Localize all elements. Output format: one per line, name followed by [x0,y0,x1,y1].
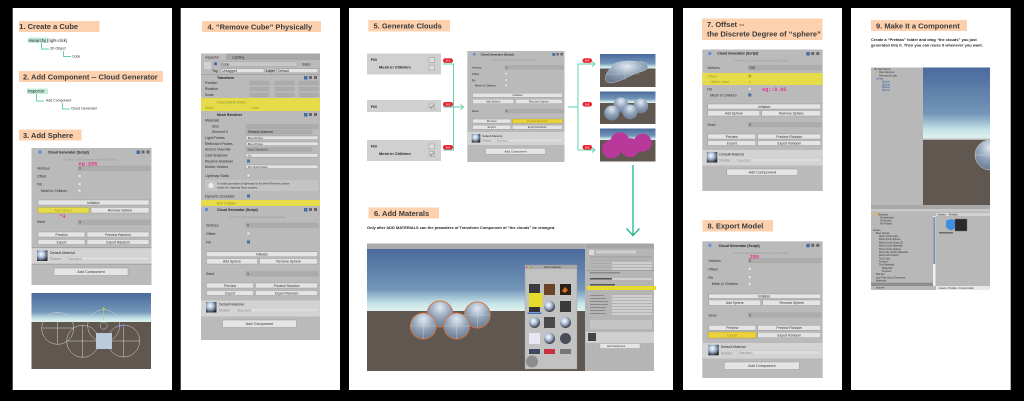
inspector: remove cube: Default [278,69,289,73]
inspector: generate clouds: Export Random [528,125,548,129]
project window: Assets [873,229,881,232]
inspector: remove cube: Motion Vectors [205,165,228,169]
inspector: remove cube: On [248,154,252,157]
inspector: remove cube: Lighting [232,55,244,59]
text: step 9 description [871,37,983,48]
result: separate spheres [600,92,656,124]
arrow: down to step 6 [626,165,640,236]
project window: Rock Aura Preset [879,254,899,257]
inspector: remove cube: Size [212,124,219,128]
inspector: generate clouds: Initialize [513,93,523,97]
inspector column [586,244,656,348]
project window: Assets [938,214,946,217]
inspector: remove cube: Static [302,62,311,66]
inspector flow: Cloud Generator [71,106,98,110]
inspector: add sphere: Export [57,240,66,244]
result: merged cloud [600,54,656,87]
project window: Textures [882,270,892,273]
inspector: offset: Seed [707,123,716,127]
inspector: add sphere: Add Sphere [55,208,73,212]
inspector: remove cube: Lightmap Static [205,174,229,178]
hierarchy list: My New Scene [874,68,891,71]
inspector: remove cube: None (Transform) [248,148,268,151]
inspector: remove cube: Scale [205,93,214,97]
inspector: remove cube: Per Object Motion [248,166,269,169]
inspector: add sphere: Cloud Generator (Script) [48,150,89,154]
hierarchy flow: 3D Object [50,46,66,50]
inspector: offset [702,50,823,191]
inspector: offset: Cloud Generator (Script) [717,52,758,56]
inspector: add sphere: Remove Sphere [108,208,132,212]
inspector: remove cube: Vertices [206,224,219,228]
inspector: offset: Mesh in Children [710,94,737,98]
inspector: remove cube: Export [225,291,235,295]
text: step 9 description: generated into it. Then you can reuse it whenever you want. [871,42,983,48]
inspector: add sphere: 0 [79,166,81,170]
project window: Low Poly Cloud Generator [876,276,905,280]
result: magenta spheres [600,128,656,162]
scene view: spheres and cube [32,293,151,369]
inspector: remove cube: Untagged [222,69,237,73]
inspector: remove cube: Fill [206,240,211,244]
inspector: export: Remove Sphere [780,301,804,305]
inspector column: Add Component [607,345,625,348]
inspector: export: Offset [708,267,718,271]
panel: steps 5 and 6 [349,8,673,390]
inspector: generate clouds: Cloud Generator (Script) [481,52,514,56]
inspector: remove cube: Layer [266,69,276,73]
icon: prefab cube [946,219,956,230]
project window: Rock Ally Infinity Materials [879,251,909,254]
inspector: generate clouds: Fill [472,78,476,82]
inspector: remove cube: Light Probes [205,136,225,140]
hierarchy list: Main Camera [879,71,895,74]
inspector: generate clouds [467,51,564,162]
heading: step 3 [19,130,82,140]
inspector: add sphere: Default-Material [50,251,75,255]
inspector flow: Add Component [46,98,71,102]
inspector: add sphere: Initialize [87,201,100,205]
inspector: remove cube: Rotation [205,87,218,91]
inspector: remove cube: Seed [206,272,214,276]
inspector: generate clouds: Default-Material [482,134,503,138]
heading: step 7 [702,18,822,40]
heading: step 2: 2. Add Component -- Cloud Generator [23,72,158,82]
project window: Favorites [878,214,889,216]
inspector: offset: Preview [726,135,738,139]
inspector: remove cube: Mesh Renderer [217,113,243,117]
inspector: offset: Default-Material [719,152,744,156]
hierarchy list: Sphere [882,86,891,89]
heading: step 3: 3. Add Sphere [23,131,73,140]
inspector: remove cube: Default-Material [248,130,273,134]
panel: step 4 [181,8,340,390]
inspector: remove cube: Reflection Probes [205,142,233,146]
inspector: generate clouds: Standard [496,139,508,143]
badges: left: 5-1 [446,59,450,63]
inspector: export: Seed [708,313,717,317]
heading: step 4: 4. “Remove Cube” Physically [208,22,313,31]
project window: Textures [879,260,889,264]
inspector: export: Add Sphere [726,301,744,305]
highlight: offset rows [702,73,823,85]
inspector: export: Low Poly Cloud Generator by NeoXStudios [733,251,789,255]
inspector: export: Default-Material [721,345,746,349]
inspector: generate clouds: 0 [506,65,508,69]
screenshot: prefab [871,68,990,290]
badges: left: 5-3 [446,145,450,149]
heading: step 6: 6. Add Materals [374,209,429,218]
project window: Best Clouds [876,232,890,235]
heading: step 5 [368,20,450,32]
inspector: add sphere: 0 [79,220,81,224]
inspector: offset: 255 [749,66,755,70]
inspector: add sphere: Export Random [106,240,130,244]
text: step 9 description: Create a “Prefabs” folder and drag “the clouds” you just [871,37,977,42]
inspector: add sphere: Preview [55,233,68,237]
scene view [923,68,990,205]
hierarchy list [874,68,897,92]
badges: left [443,58,453,150]
inspector: offset: Add Component [749,170,777,174]
arrow: inspector to results [568,62,595,152]
inspector: generate clouds: Remove Sphere [529,99,549,103]
heading: step 6 [368,208,439,218]
project window: All Materials [880,216,894,220]
inspector: remove cube: Anchor Override [205,148,231,152]
inspector: remove cube: Initialize [256,252,268,256]
project window: Prefabs [949,214,958,217]
option box: no fill [367,54,441,74]
hierarchy flow [28,38,80,58]
inspector: remove cube: Dynamic Occluded [205,194,234,198]
inspector: offset: Shader [719,158,731,162]
inspector: remove cube: 0 [247,272,249,276]
inspector: export: Add Component [748,364,776,368]
highlight: export button: Export [727,333,737,337]
hierarchy list: Sphere [882,83,891,86]
highlight: mesh filter [201,98,320,111]
inspector: generate clouds: Add Sphere [486,99,501,103]
inspector: offset: Standard [736,158,751,162]
inspector: add sphere: Seed [37,220,45,224]
hierarchy list: Directional Light [879,74,897,77]
hierarchy list: Sphere [882,89,891,92]
project window: Test Materials [879,264,895,267]
inspector: offset: Low Poly Cloud Generator by NeoXStudios [733,58,789,62]
heading: step 1 [19,21,100,32]
highlight: box collider: Box Collider [217,202,237,206]
icon: dark prefab [955,219,967,231]
option box: mesh in children: Fill [371,144,377,148]
inspector: add sphere: Shader [50,257,62,261]
project window: All Models [880,220,892,222]
highlight: offset rows: 0 [749,80,751,84]
inspector: remove cube: Receive Shadows [205,160,233,164]
highlight: mesh filter: Cube [251,106,259,110]
inspector: offset: Preview Random [776,135,802,139]
panel: steps 7 and 8 [683,8,842,390]
inspector: remove cube: Preview [224,284,237,288]
inspector: generate clouds: Seed [472,109,479,113]
inspector: export: Cloud Generator (Script) [719,244,760,248]
inspector: remove cube: Shader [219,308,231,312]
project window: Rock Circle Options [879,248,902,251]
inspector: offset: Export [727,141,737,145]
inspector flow: Inspector [28,89,45,94]
inspector: offset: Initialize [758,105,771,109]
inspector: export: Preview Random [776,326,802,330]
inspector: remove cube: To enable generation of lightmaps for this Mesh Renderer, please [217,182,290,186]
option box: mesh in children: Mesh in Children [379,151,411,156]
project window: Materials [876,280,887,283]
project window: Rock Circle Sphere [879,238,901,241]
inspector: export: 0 [749,313,751,317]
heading: step 7: the Discrete Degree of “sphere” [707,30,821,38]
inspector: remove cube: Preview Random [274,284,300,288]
badges: right: 5-1 [585,59,590,63]
inspector: remove cube: Low Poly Cloud Generator by NeoXStudios [230,215,286,219]
project window: Scenes [876,286,885,290]
text: step 6 note: Only after ADD MATERIALS can the pramaters of Transform Component of “the clouds” be changed. [367,225,555,230]
screenshot: add materials [367,244,656,371]
inspector: remove cube: Remove Sphere [276,260,301,264]
inspector: generate clouds: Export [488,125,496,129]
highlight: shader row [587,286,656,290]
highlight: material [529,293,542,307]
inspector: remove cube: Element 0 [212,130,228,134]
project window: All Prefabs [880,223,893,226]
hierarchy flow: Hierarchy (right-click) [28,38,68,43]
inspector: remove cube: Inspector [205,55,220,59]
inspector: generate clouds: Add Component [504,149,527,153]
inspector: offset: Add Sphere [725,112,743,116]
inspector: remove cube: Default-Material [219,302,244,306]
hierarchy flow: Cube [72,54,80,58]
inspector: remove cube: Transform [217,76,234,80]
inspector: export: Shader [721,351,733,355]
highlight: mesh filter: Mesh [205,106,214,110]
highlight: mesh filter: Cube (Mesh Filter) [217,100,246,104]
inspector: remove cube [201,54,320,340]
inspector: remove cube: Cast Shadows [205,154,228,158]
inspector: remove cube: Position [205,81,218,85]
inspector: generate clouds: Low Poly Cloud Generator by NeoXStudios [492,59,537,62]
inspector: add sphere: Add Component [77,270,106,274]
inspector: export: Fill [708,276,713,280]
hierarchy list: Sphere [882,80,891,84]
inspector: remove cube: enable the 'Lightmap Static' property. [217,186,258,190]
inspector: add sphere: Offset [37,174,46,178]
highlight: offset rows: Offset Value [710,80,729,84]
inspector: export: Preview [726,326,739,330]
inspector: add sphere: Preview Random [105,233,131,237]
option box: no fill: Mesh in Children [379,65,411,70]
inspector: offset: Fill [707,88,712,92]
inspector: add sphere: Standard [68,257,82,261]
inspector: export: Vertices [708,259,721,263]
inspector: export: Standard [738,351,753,355]
window: select material: Select Material [544,266,561,269]
badges: right: 5-2 [585,102,590,106]
project window: Materials [882,267,893,270]
inspector: add sphere: Mesh in Children [41,189,67,193]
heading: step 1: 1. Create a Cube [19,22,78,31]
project window: Rock Circle Cube [879,235,899,238]
project window: Rock Circle Materials [879,245,903,248]
inspector: remove cube: Add Component [246,322,274,326]
heading: step 9: 9. Make It a Component [876,22,960,30]
badges: right: 5-3 [585,145,590,149]
inspector: generate clouds: 0 [506,109,508,113]
inspector: offset: Remove Sphere [779,112,804,116]
inspector: remove cube: Cloud Generator (Script) [217,208,258,212]
option box: no fill: Fill [371,57,377,62]
inspector: remove cube: Blend Probes [248,143,264,146]
highlight: offset rows: Offset [707,74,717,78]
project window: Assets / Prefabs / Cloud prefab [939,287,974,290]
project window: Test Cubs [879,258,891,260]
inspector: offset: 0 [749,123,751,127]
hierarchy list: clouds [876,78,884,80]
inspector: export: 0 [749,259,751,263]
project window [871,205,990,290]
inspector: offset: Vertices [707,66,720,70]
inspector: export: Initialize [758,295,771,299]
inspector: add sphere [32,148,152,285]
label: eg 255: eg:255 [78,162,97,168]
inspector: export [702,241,823,378]
inspector: generate clouds: Vertices [472,65,482,69]
inspector flow [27,88,98,110]
inspector: export: Export Random [778,333,801,337]
highlight: box collider [201,200,320,206]
inspector: remove cube: Export Random [275,291,298,295]
panel: step 9 [851,8,1011,390]
heading: step 8: 8. Export Model [708,222,763,230]
panel: steps 1 to 3 [13,8,172,390]
inspector: offset: Export Random [778,141,801,145]
inspector: remove cube: Offset [206,232,215,236]
project window: Rock Circle Group 02 [879,241,904,244]
badges: left: 5-2 [446,102,450,106]
inspector: generate clouds: Preview Random [527,119,549,123]
inspector: remove cube: Blend Probes [248,137,264,140]
inspector: remove cube: Cube [221,62,229,66]
inspector: generate clouds: Offset [472,72,479,76]
inspector: remove cube: 0 [247,224,249,228]
arrow: options to inspector [443,64,464,150]
inspector: generate clouds: Mesh in Children [475,84,497,88]
inspector: generate clouds: Shader [482,139,491,143]
inspector: remove cube: Tag [212,69,218,73]
inspector: add sphere: Fill [37,182,42,186]
option box: mesh in children [367,140,441,161]
label: eg 0.05: eg::0.05 [762,87,786,93]
badges: right [582,58,592,150]
inspector: remove cube: Standard [237,308,251,312]
inspector: add sphere: Low Poly Cloud Generator by NeoXStudios [62,158,118,162]
label: times 4: *4 [60,214,66,220]
inspector: remove cube: Materials [205,118,219,122]
heading: step 5: 5. Generate Clouds [374,22,442,30]
inspector: add sphere: Vertices [37,166,50,170]
inspector: remove cube: Add Sphere [223,260,241,264]
inspector: export: Mesh in Children [712,282,738,286]
option box: fill: Fill [371,104,377,109]
heading: step 7: 7. Offset -- [707,20,745,29]
label: 255: 255 [750,254,759,260]
window: select material [525,265,577,369]
project window: Mat Ext [876,273,885,276]
option box: fill [367,100,441,112]
heading: step 8 [702,220,773,232]
inspector: generate clouds: Preview [487,119,497,123]
